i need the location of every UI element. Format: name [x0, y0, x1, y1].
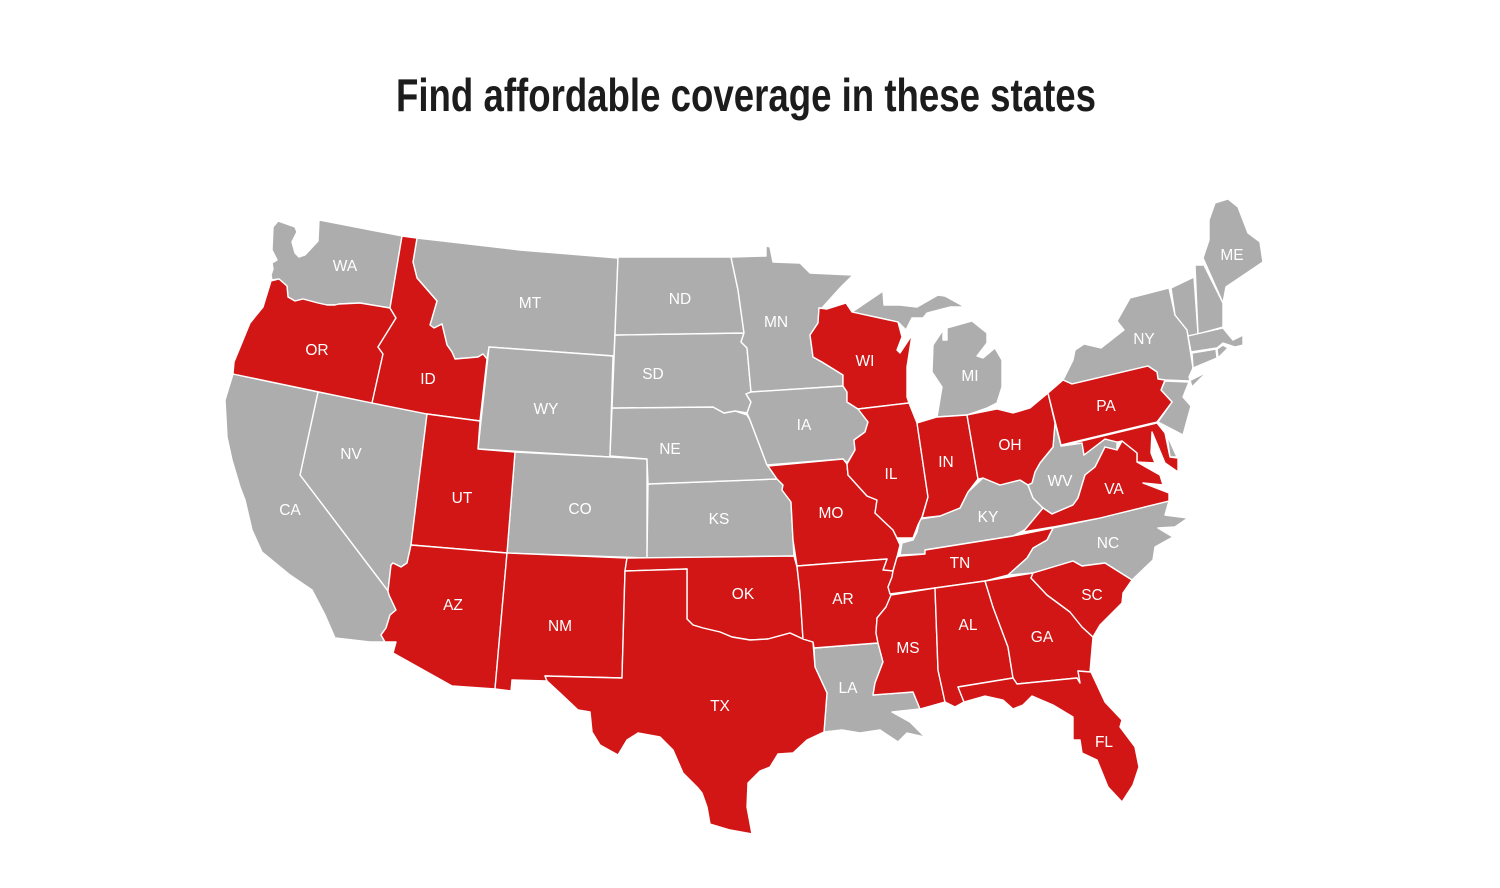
state: FL: FL [1095, 734, 1113, 751]
state: TN [888, 528, 1053, 594]
state: NE: NE [659, 441, 681, 458]
state: IA [746, 386, 868, 465]
state: NJ [1158, 381, 1191, 435]
state: WV: WV [1048, 473, 1073, 490]
state: LA [814, 643, 925, 742]
state: KS [647, 479, 794, 558]
state: NM: NM [548, 618, 572, 635]
state: MO: MO [819, 505, 843, 522]
state: NC [1008, 501, 1188, 580]
state: PA [1048, 366, 1172, 445]
state: SC: SC [1081, 587, 1103, 604]
state: SD [612, 333, 751, 413]
state: TX: TX [710, 698, 731, 715]
state: ND [615, 257, 744, 335]
state: WI: WI [856, 353, 874, 370]
state: ME: ME [1220, 247, 1244, 264]
state: NV [300, 392, 427, 591]
state: VA: VA [1104, 481, 1124, 498]
state: CT [1192, 349, 1217, 368]
state: MN: MN [764, 314, 788, 331]
state: TN: TN [950, 555, 970, 572]
state: SD: SD [642, 366, 664, 383]
state: AL [935, 581, 1013, 707]
state: NY [1063, 288, 1207, 387]
state: KY: KY [978, 509, 998, 526]
state: WI [810, 303, 912, 409]
state: MN [731, 246, 853, 392]
state: AL: AL [959, 617, 978, 634]
state: NH [1195, 265, 1223, 334]
state: WY: WY [534, 401, 558, 418]
state: IN [917, 415, 978, 518]
state: WV [1028, 423, 1117, 514]
state: IN: IN [938, 454, 954, 471]
state: OK: OK [732, 586, 755, 603]
state: FL [958, 671, 1139, 802]
title: Find affordable coverage in these states [396, 69, 1096, 121]
state: OH [967, 393, 1055, 485]
state: IA: IA [797, 417, 812, 434]
map of the United States [225, 199, 1263, 834]
state: UT [411, 414, 515, 553]
state: MS [873, 588, 945, 709]
state: NV: NV [340, 446, 362, 463]
state: WA [271, 220, 402, 308]
state: SC [1031, 561, 1132, 637]
state: OH: OH [998, 437, 1022, 454]
state: MT: MT [519, 295, 542, 312]
state: PA: PA [1096, 398, 1116, 415]
state: CA: CA [279, 502, 301, 519]
state: KS: KS [709, 511, 729, 528]
state: MO [768, 459, 900, 571]
state: MS: MS [896, 640, 920, 657]
state: OR: OR [305, 342, 329, 359]
state: TX [545, 569, 827, 834]
state: OR [233, 279, 396, 403]
state: AR [797, 559, 893, 648]
state: DE [1167, 435, 1177, 457]
state: MI: MI [961, 368, 979, 385]
state: ME [1203, 199, 1263, 303]
state: RI [1217, 345, 1228, 358]
state: ID [372, 236, 487, 421]
state: IL [847, 403, 928, 538]
state: IL: IL [885, 466, 898, 483]
state: NY: NY [1133, 331, 1155, 348]
state: NE [610, 407, 777, 484]
state: MD [1061, 423, 1178, 472]
state: MT [413, 238, 618, 359]
state: AZ: AZ [443, 597, 463, 614]
state: AZ [381, 545, 507, 689]
state: CA [225, 374, 396, 642]
state: UT: UT [452, 490, 473, 507]
state: WA: WA [333, 258, 358, 275]
state: WY [478, 347, 613, 457]
state: MI [852, 291, 1002, 417]
state: CO [507, 452, 647, 558]
state: GA: GA [1031, 629, 1054, 646]
state: AR: AR [832, 591, 854, 608]
state: GA [985, 573, 1093, 684]
state: KY [900, 478, 1043, 555]
state: NC: NC [1097, 535, 1119, 552]
state: ND: ND [669, 291, 691, 308]
state: OK [625, 556, 803, 640]
state: CO: CO [568, 501, 592, 518]
state: VT [1171, 277, 1198, 336]
state: VA [1023, 441, 1169, 532]
state: ID: ID [420, 371, 436, 388]
state: NM [495, 553, 627, 691]
state: LA: LA [839, 680, 858, 697]
state: MA [1188, 328, 1243, 352]
